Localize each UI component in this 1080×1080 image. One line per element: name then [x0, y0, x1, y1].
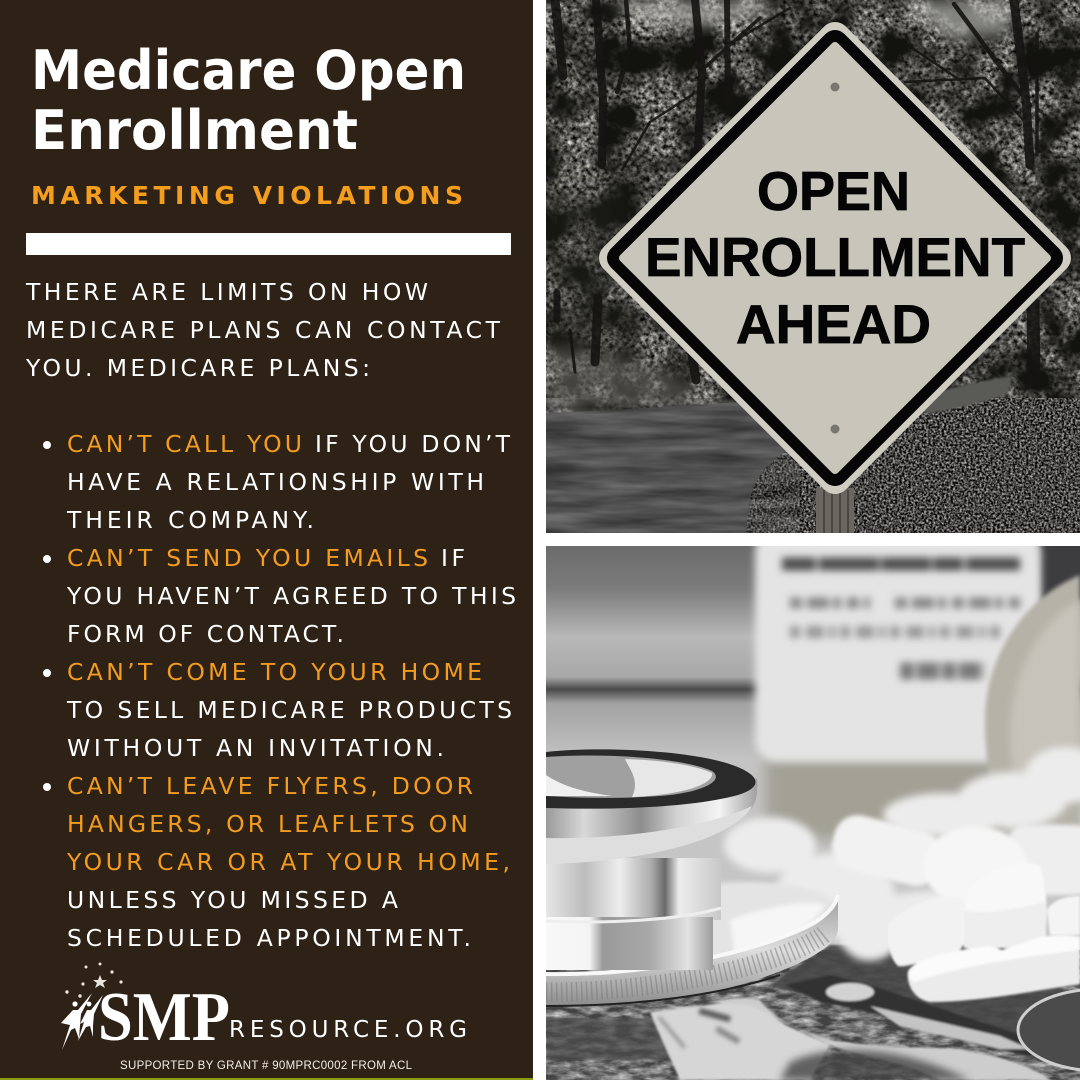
subtitle: MARKETING VIOLATIONS [31, 181, 463, 210]
intro text: MEDICARE PLANS CAN CONTACT [26, 316, 501, 344]
sign text: ENROLLMENT [645, 226, 1025, 288]
upper dark note [770, 945, 1080, 1060]
sign text: AHEAD [736, 293, 931, 355]
grant note: SUPPORTED BY GRANT # 90MPRC0002 FROM ACL [120, 1060, 413, 1072]
sign text [648, 171, 1025, 344]
blurred bottle [755, 530, 1041, 840]
warning sign diamond [614, 37, 1056, 479]
pile of pills [724, 747, 1080, 1002]
title [31, 39, 466, 162]
bullet: emails: YOU HAVEN’T AGREED TO THIS [66, 582, 516, 610]
logo wordmark resource.org: RESOURCE.ORG [229, 1017, 467, 1043]
tree trunks [555, 0, 1037, 383]
bullet: flyers: YOUR CAR OR AT YOUR HOME, [66, 848, 510, 876]
bullet: emails: IF [441, 544, 465, 572]
logo: SMP Resource [61, 962, 467, 1056]
stethoscope base disc [713, 880, 804, 957]
intro text [25, 278, 501, 382]
bullet: home visits: WITHOUT AN INVITATION. [67, 734, 444, 762]
bullet: calls: IF YOU DON’T [315, 430, 511, 458]
left dark print [546, 1018, 671, 1060]
title: Enrollment [31, 99, 358, 162]
blurred bottle cap [985, 575, 1080, 830]
bullet: calls: CAN’T CALL YOU [67, 430, 302, 458]
bullet: emails: FORM OF CONTACT. [67, 620, 344, 648]
blurred backdrop [546, 546, 1080, 950]
intro text: THERE ARE LIMITS ON HOW [25, 278, 428, 306]
photo: stethoscope, pills and money [546, 530, 1080, 1080]
portrait strip [785, 975, 1050, 1056]
intro text: YOU. MEDICARE PLANS: [25, 354, 370, 382]
bottom dark bill texture [780, 1050, 970, 1080]
sharp front pills [888, 863, 1080, 1002]
bullet: flyers: CAN’T LEAVE FLYERS, DOOR [67, 772, 473, 800]
bullet: calls: THEIR COMPANY. [66, 506, 314, 534]
stethoscope head band [546, 778, 758, 838]
ground right [740, 398, 1080, 534]
bullet: emails [43, 544, 516, 648]
bullet: home visits: TO SELL MEDICARE PRODUCTS [66, 696, 512, 724]
bullet: home visits: CAN’T COME TO YOUR HOME [67, 658, 482, 686]
torn strip [706, 998, 1050, 1080]
forest background [546, 0, 1080, 534]
bullet: home visits [43, 658, 512, 762]
sign bolts [830, 82, 840, 92]
title: Medicare Open [31, 39, 466, 102]
bullet: flyers: UNLESS YOU MISSED A [67, 886, 398, 914]
bullet: calls [43, 430, 511, 534]
stethoscope neck [546, 858, 721, 920]
white divider bar [26, 233, 511, 255]
panel: text column [0, 0, 533, 1080]
blurred rear pills [724, 747, 1080, 961]
bullet: flyers: SCHEDULED APPOINTMENT. [67, 924, 471, 952]
money on table [546, 945, 1080, 1080]
logo wordmark SMP: SMP [98, 979, 230, 1056]
photo: road sign in forest [546, 0, 1080, 534]
printed digits on bill [658, 1008, 741, 1049]
light paper left [650, 1000, 830, 1080]
sign text: OPEN [757, 160, 910, 222]
road [546, 376, 1012, 533]
bullet: emails: CAN’T SEND YOU EMAILS [67, 544, 428, 572]
bullet: calls: HAVE A RELATIONSHIP WITH [67, 468, 484, 496]
stethoscope [546, 749, 838, 1006]
bullet: flyers: HANGERS, OR LEAFLETS ON [67, 810, 468, 838]
stethoscope head rim [546, 749, 756, 809]
icon: stars [65, 962, 123, 998]
icon: leaping figures [61, 993, 103, 1050]
sign post [816, 488, 854, 534]
coin [1018, 989, 1080, 1071]
bullet: flyers [43, 772, 510, 952]
